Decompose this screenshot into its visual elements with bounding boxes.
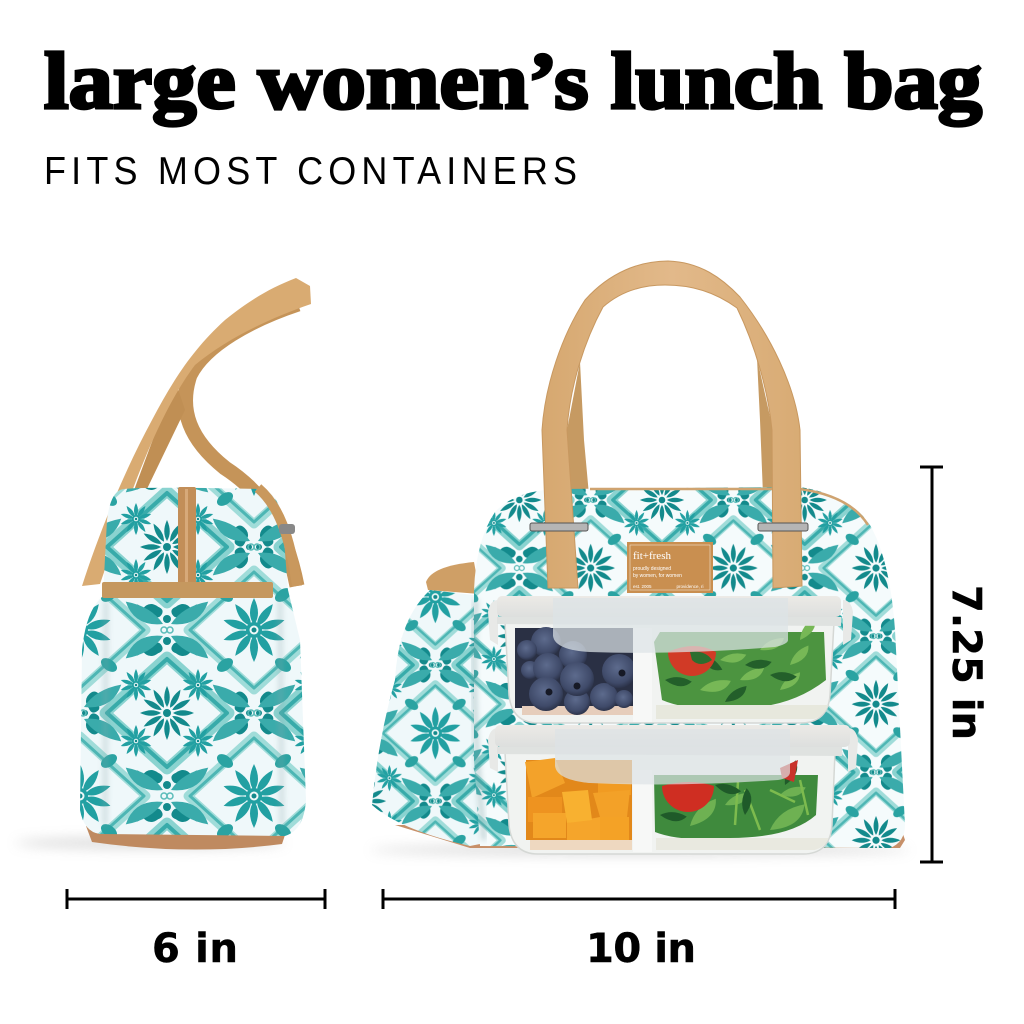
brand label [627, 542, 713, 593]
strap front lower segment [258, 488, 297, 586]
pocket seam shadow [474, 600, 484, 840]
dimension: 7.25 in [920, 467, 989, 862]
title: large women’s lunch bag [44, 38, 982, 126]
salad: upper [654, 618, 828, 719]
width rule: side [67, 889, 325, 909]
side pocket [372, 590, 500, 846]
right metal buckle [758, 523, 808, 531]
lid clip: upper [553, 598, 788, 653]
pocket trim [102, 582, 273, 598]
ground shadow: front bag [370, 845, 910, 855]
far strap [108, 380, 185, 560]
pocket rim [426, 562, 480, 594]
lid rim: upper [497, 596, 841, 617]
brand label: fit+fresh [633, 550, 671, 562]
side metal buckle [279, 524, 295, 534]
lid clip: lower [555, 729, 790, 784]
front handle [542, 261, 802, 588]
looped strap upper [185, 304, 298, 586]
brand label: by women, for women [633, 573, 682, 579]
patterned bag body [474, 487, 905, 848]
cheese cubes [525, 758, 632, 850]
front view lunch bag [370, 261, 910, 855]
divider: upper [633, 628, 652, 722]
divider: lower [633, 770, 652, 852]
ground shadow: side bag [15, 837, 285, 849]
glass: lower [505, 752, 835, 854]
blueberries [515, 627, 636, 715]
lid side clips: upper [488, 600, 853, 645]
bag base [395, 825, 905, 848]
bag base [86, 826, 288, 850]
salad: lower [654, 760, 828, 850]
width rule: front [383, 889, 895, 909]
lower glass container [488, 725, 858, 854]
glass: upper [505, 622, 834, 723]
patterned bag body [80, 488, 306, 836]
left metal buckle [530, 523, 588, 531]
top zipper trim [590, 489, 868, 525]
top strap [82, 278, 311, 586]
height rule [920, 467, 943, 862]
brand label: proudly designed [633, 566, 671, 572]
lid lip: upper [497, 617, 841, 626]
brand label: providence, ri [676, 584, 704, 589]
width label: side: 6 in [152, 926, 238, 972]
back handle left [567, 362, 589, 495]
vertical zipper [178, 487, 196, 584]
height label: 7.25 in [943, 585, 989, 740]
side view lunch bag [15, 278, 311, 850]
width label: front: 10 in [586, 926, 696, 972]
lid lip: lower [497, 747, 842, 756]
back handle right [757, 358, 773, 495]
upper glass container [488, 596, 853, 723]
subtitle: FITS MOST CONTAINERS [44, 149, 577, 192]
body side panel shading [105, 600, 282, 825]
lid rim: lower [495, 725, 850, 747]
brand label: est. 2005 [633, 584, 652, 589]
dimension: 6 in [67, 889, 325, 972]
dimension: 10 in [383, 889, 895, 972]
lid side clips: lower [488, 728, 858, 772]
